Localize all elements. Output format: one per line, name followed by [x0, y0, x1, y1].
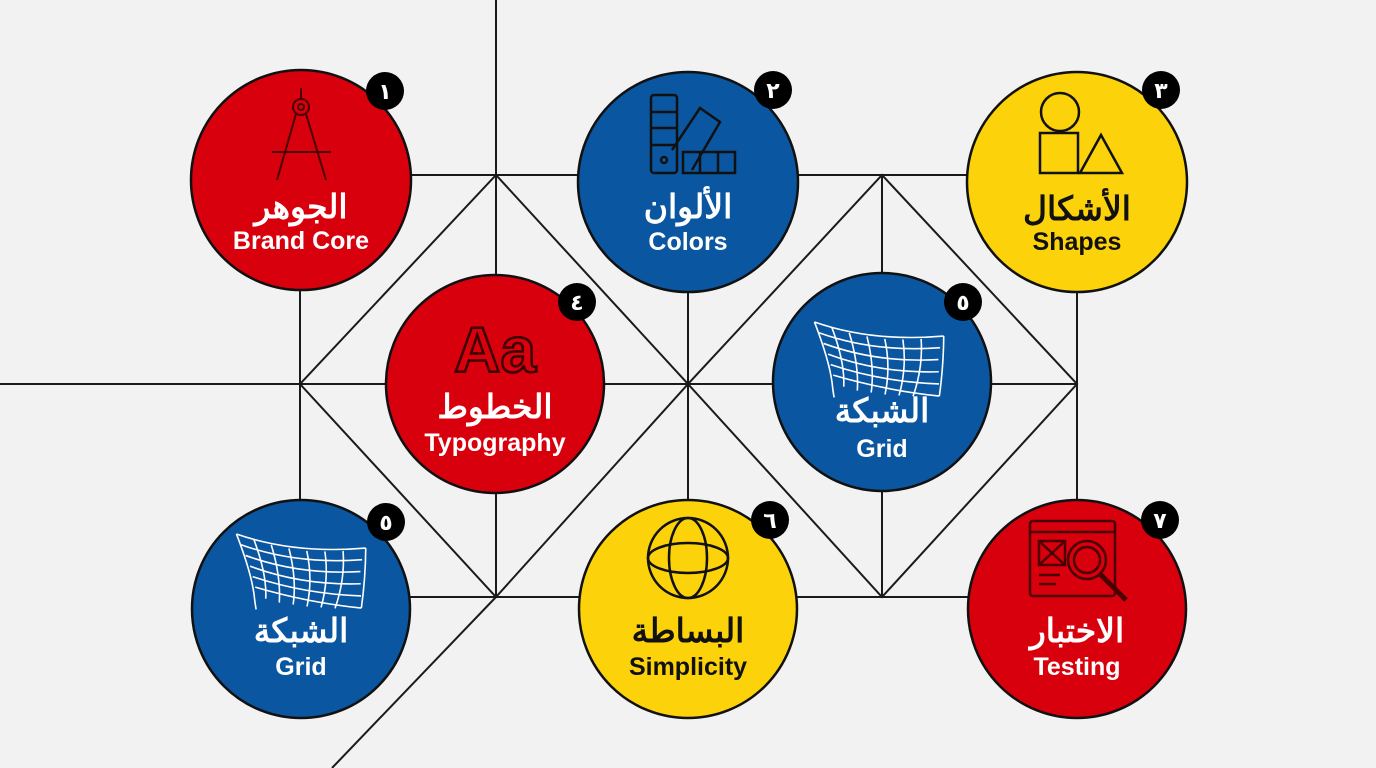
badge 2: [754, 71, 792, 109]
badge 1: ١: [378, 79, 392, 104]
panel 7: simplicity: [579, 500, 797, 718]
panel 3: shapes: [967, 71, 1187, 292]
badge 5: ٥: [956, 290, 970, 315]
badge 2: ٢: [766, 78, 780, 103]
panel 6: grid (bottom): [192, 500, 410, 718]
panel 5: grid: الشبكة: [835, 392, 929, 429]
badge 4: [558, 283, 596, 321]
grid lines: [0, 0, 1077, 768]
panel 3: shapes: Shapes: [1033, 228, 1121, 256]
panel 2: colors: الألوان: [644, 185, 732, 227]
icon: shapes: [1040, 93, 1122, 173]
panel 6: grid (bottom): الشبكة: [254, 612, 348, 649]
icon: globe: [648, 518, 728, 598]
badge 7: ٧: [1153, 508, 1167, 533]
badge 1: [366, 72, 404, 110]
badge 5b: ٥: [379, 510, 393, 535]
badge 3: [1142, 71, 1180, 109]
panel 7: simplicity: Simplicity: [629, 653, 747, 681]
panel 5: grid: Grid: [856, 435, 908, 463]
panel 8: testing: الاختبار: [1028, 612, 1124, 651]
badge 3: ٣: [1154, 78, 1168, 103]
panel 1: brand core: الجوهر: [252, 188, 348, 227]
panel 3: shapes: الأشكال: [1023, 187, 1131, 227]
panel 2: colors: [578, 71, 798, 292]
icon: Aa: Aa: [454, 314, 536, 386]
panel 1: brand core: Brand Core: [233, 227, 369, 255]
panel 8: testing: [968, 500, 1186, 718]
icon: compass: [272, 88, 331, 180]
badge 7: [1141, 501, 1179, 539]
icon: swatches: [651, 95, 735, 173]
icon: warped grid: [804, 318, 948, 412]
icon: testing: [1030, 521, 1126, 600]
badge 5: [944, 283, 982, 321]
panel 4: typography: [386, 275, 604, 493]
badge 5b: [367, 503, 405, 541]
panel 2: colors: Colors: [648, 228, 728, 256]
panel 4: typography: الخطوط: [437, 388, 553, 427]
panel 6: grid (bottom): Grid: [275, 653, 327, 681]
badge 6: [751, 501, 789, 539]
badge 6: ٦: [763, 508, 777, 533]
panel 7: simplicity: البساطة: [632, 612, 744, 649]
panel 5: grid: [773, 273, 991, 491]
badge 4: ٤: [570, 290, 584, 315]
icon: warped grid: [226, 530, 370, 624]
panel 8: testing: Testing: [1033, 653, 1121, 681]
panel 1: brand core: [191, 70, 411, 290]
panel 4: typography: Typography: [424, 429, 566, 457]
